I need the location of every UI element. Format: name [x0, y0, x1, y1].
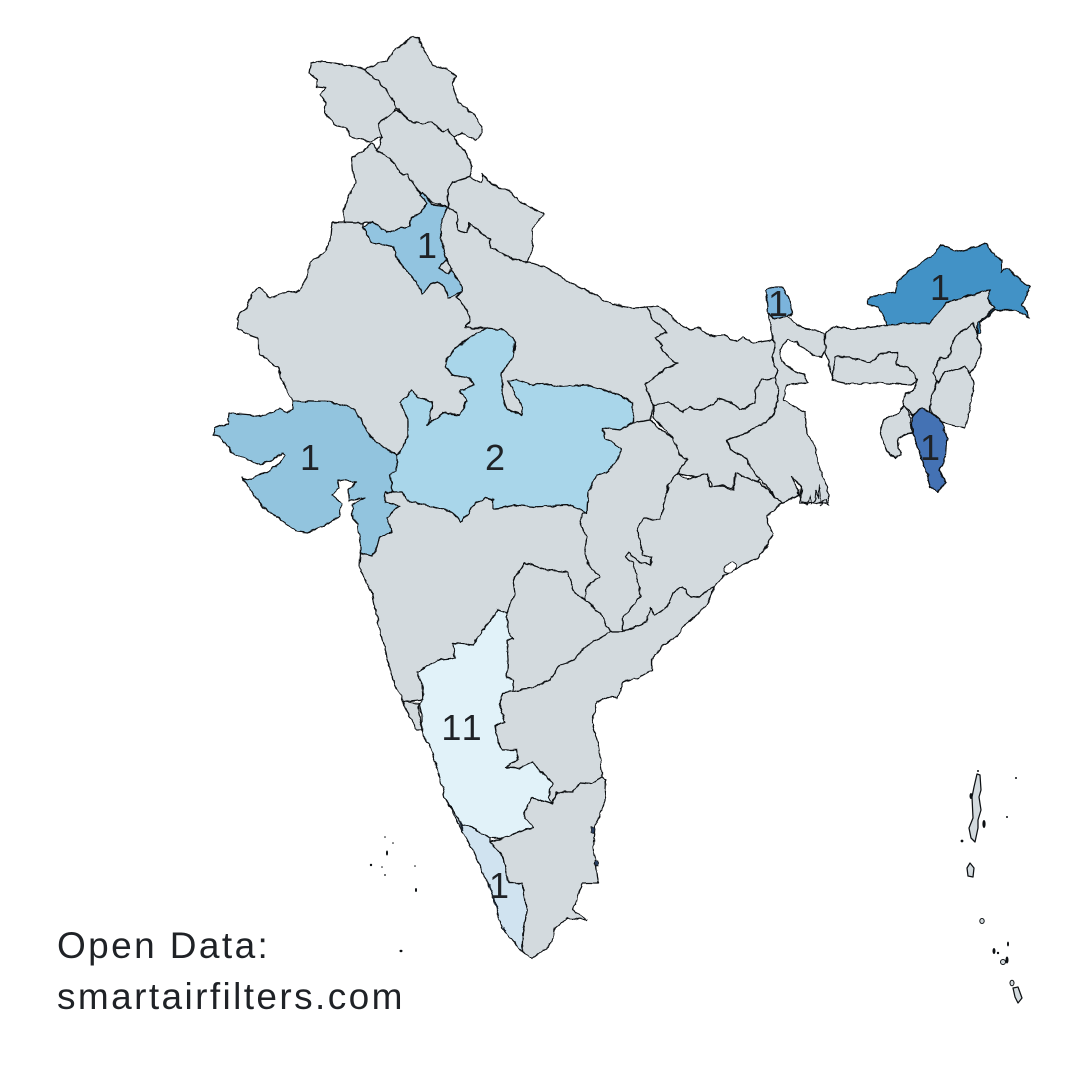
- source note: [57, 925, 405, 1017]
- state: Sikkim: [766, 287, 793, 318]
- lagoons: Tamil Nadu coast: [591, 827, 598, 866]
- state: Nagaland: [933, 323, 982, 382]
- state: Manipur: [930, 367, 974, 428]
- delta: Sundarbans: [798, 485, 829, 506]
- state: Goa: [403, 702, 422, 730]
- count: Gujarat: 1: [300, 437, 320, 478]
- count: Madhya Pradesh: 2: [485, 437, 505, 478]
- islands: Andaman and Nicobar: [961, 770, 1022, 1003]
- state: Arunachal Pradesh: [868, 243, 1030, 333]
- state: Mizoram: [912, 408, 947, 492]
- state: Uttarakhand: [448, 174, 545, 262]
- state: Kerala: [445, 798, 527, 952]
- state: Gujarat: [213, 401, 400, 556]
- state: Bihar: [645, 306, 778, 412]
- state: Meghalaya: [832, 353, 918, 385]
- state: Telangana: [507, 563, 610, 691]
- state: Maharashtra: [359, 492, 600, 702]
- state: Assam: [825, 289, 995, 415]
- state: Rajasthan: [237, 222, 487, 455]
- islands: Lakshadweep: [370, 836, 417, 952]
- state: Uttar Pradesh: [440, 207, 678, 423]
- count: Karnataka: 11: [441, 707, 485, 748]
- state: Karnataka: [417, 610, 553, 838]
- state: Madhya Pradesh: [390, 328, 633, 522]
- territory: Delhi: [439, 260, 452, 274]
- state: Ladakh: [365, 37, 483, 141]
- state: Jharkhand: [653, 378, 779, 488]
- state: Haryana: [363, 192, 462, 298]
- lake: Chilika: [722, 560, 738, 576]
- state: Jammu and Kashmir: [309, 61, 397, 142]
- state: Andhra Pradesh: [495, 587, 715, 804]
- state: Tamil Nadu: [490, 777, 606, 958]
- count: Arunachal Pradesh: 1: [930, 267, 950, 308]
- state: Odisha: [622, 473, 782, 632]
- state: Tripura: [880, 405, 912, 458]
- state: West Bengal: [727, 313, 829, 503]
- count: Kerala: 1: [489, 865, 509, 906]
- source note: Open Data:: [57, 925, 270, 966]
- count: Haryana: 1: [417, 225, 437, 266]
- count: Sikkim: 1: [768, 283, 788, 324]
- backwaters: Kerala coast: [460, 822, 506, 931]
- state: Punjab: [343, 143, 427, 233]
- mainland states: [213, 37, 1030, 958]
- state: Chhattisgarh: [580, 420, 687, 632]
- state: Himachal Pradesh: [377, 110, 472, 207]
- count: Mizoram: 1: [920, 427, 940, 468]
- source note: smartairfilters.com: [57, 976, 405, 1017]
